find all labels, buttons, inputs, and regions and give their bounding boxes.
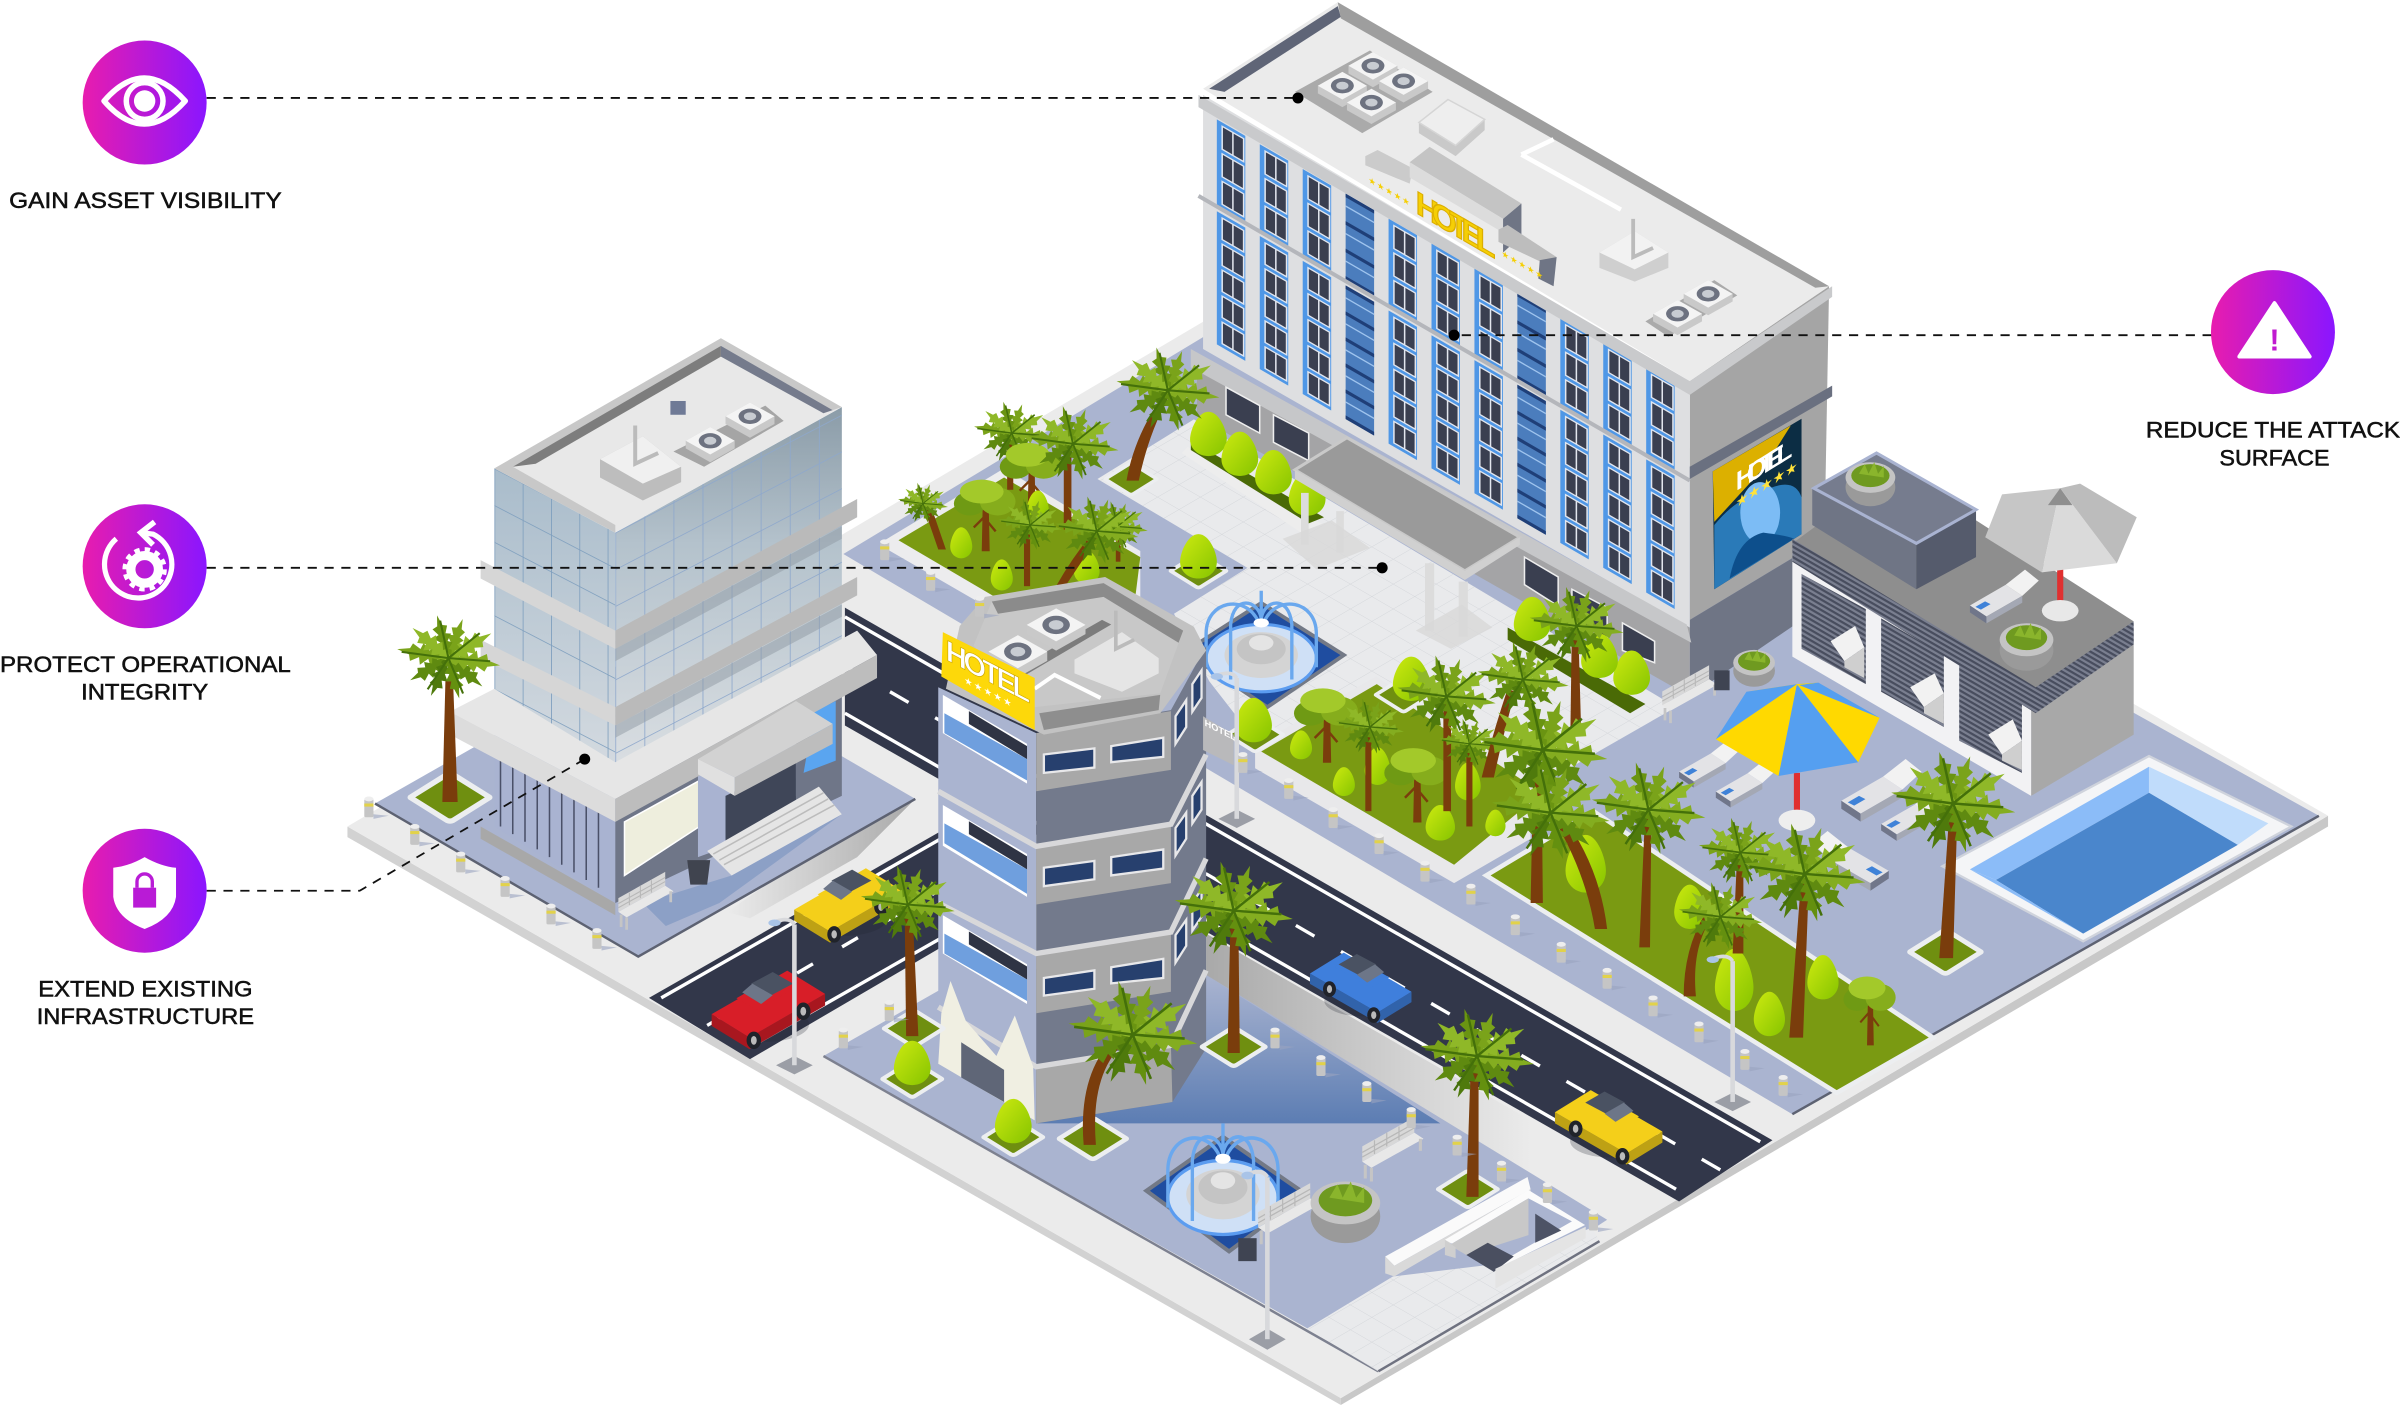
- tower entrance: [938, 981, 1035, 1120]
- tiled plaza: [1097, 419, 1676, 804]
- roof vent box: [1419, 99, 1485, 156]
- roof skylight outline: [1521, 139, 1621, 210]
- entrance stairs: [707, 787, 842, 875]
- roof parapet: [1209, 6, 1341, 92]
- middle garden trees and palms: [1290, 585, 1625, 841]
- roof hatch: [600, 425, 681, 500]
- label: reduce the attack surface: [2146, 418, 2400, 470]
- label: reduce the attack surface: REDUCE THE ATTACK: [2146, 418, 2400, 443]
- label: reduce the attack surface: SURFACE: [2219, 445, 2330, 470]
- annex loungers: [1831, 626, 2022, 770]
- blue screen: [804, 701, 836, 773]
- floor slab middle: [481, 577, 857, 738]
- bench and planter by hotel corner: [1662, 650, 1775, 723]
- right resort plot: [843, 263, 2319, 1114]
- billboard: [1713, 419, 1802, 589]
- icon: warning triangle: [2211, 270, 2335, 394]
- road: side street: [649, 826, 949, 1059]
- palm tree left: [395, 613, 502, 821]
- main hotel building: [1182, 2, 1832, 696]
- label: extend existing infrastructure: INFRASTRUCTURE: [37, 1004, 254, 1029]
- street lamps: [768, 673, 1751, 1350]
- left building plot: [375, 646, 915, 957]
- tower hotel sign: ★★★★★: [964, 675, 1013, 711]
- bench: [618, 872, 673, 930]
- rooftop hotel sign: [1365, 147, 1557, 286]
- icon: warning triangle: !: [2269, 323, 2280, 357]
- sidewalk shadows: [727, 799, 1531, 1178]
- small hotel directory sign: [1203, 716, 1236, 765]
- hotel window columns: [1217, 119, 1675, 609]
- rooftop hotel sign: HOTEL: [1416, 185, 1495, 266]
- front tiled corner: [1307, 1227, 1599, 1371]
- hotel roof: [1203, 2, 1829, 381]
- roof lounger: [1970, 570, 2039, 623]
- octagonal hotel tower: [938, 577, 1206, 1123]
- plinth: [481, 826, 615, 915]
- back garden palms and trees: [897, 345, 1221, 590]
- colourful parasol: [1716, 683, 1880, 831]
- red car: [712, 971, 825, 1049]
- label: protect operational integrity: [0, 652, 291, 704]
- subway stair entrance: [1385, 1177, 1586, 1289]
- tower side windows: [1044, 670, 1202, 996]
- label: extend existing infrastructure: [37, 976, 254, 1029]
- tower floor lips: [938, 755, 1206, 1067]
- yellow car right: [1555, 1090, 1662, 1165]
- road: main diagonal: [845, 608, 1772, 1201]
- dashed connector: protect operational integrity: [207, 562, 1388, 573]
- canopy slab: [450, 631, 877, 822]
- front plot palms: [859, 859, 1536, 1207]
- annex pool house: [1792, 453, 2137, 796]
- annex striped openings: [1802, 574, 2022, 773]
- cars: [712, 868, 1662, 1165]
- billboard: HOTEL: [1736, 433, 1792, 498]
- glass right face: [615, 407, 842, 799]
- hotel base cornice: [1191, 349, 1691, 643]
- small hotel directory sign: HOTEL: [1205, 718, 1236, 744]
- tower front balconies: [943, 695, 1027, 1004]
- entrance awning: [698, 701, 833, 796]
- tower hotel sign: HOTEL: [946, 633, 1030, 710]
- lawn: long garden: [1486, 811, 1933, 1093]
- pool: [1942, 756, 2291, 941]
- blue car: [1310, 953, 1411, 1023]
- hotel side wall: [1690, 286, 1829, 620]
- lawn: middle garden: [1255, 676, 1531, 883]
- roof air conditioners: [670, 401, 784, 467]
- annex roof box: [1812, 453, 1976, 589]
- roof: [494, 338, 842, 533]
- billboard: ★★★★★: [1736, 457, 1797, 512]
- back fountain: [1185, 591, 1344, 707]
- dashed connector: gain asset visibility: [207, 92, 1303, 103]
- hotel ground floor: [1197, 355, 1690, 696]
- grey parasol: [1985, 484, 2137, 621]
- tower roof: [946, 577, 1206, 735]
- floor slab upper: [481, 499, 857, 661]
- yellow pickup left: [794, 868, 902, 943]
- front fountain: [1146, 1123, 1306, 1251]
- ground floor left wall: [494, 735, 615, 903]
- ground slab: [347, 244, 2328, 1405]
- pool deck loungers: [1679, 740, 1946, 891]
- front plaza furniture: [1238, 1117, 1423, 1261]
- dashed connector: reduce the attack surface: [1449, 330, 2212, 341]
- front plot: [823, 967, 1607, 1371]
- hotel facade: [1203, 95, 1690, 628]
- label: protect operational integrity: PROTECT OPERATIONAL: [0, 652, 291, 677]
- trash bin: [687, 860, 710, 885]
- bollards: [364, 539, 1803, 1232]
- rooftop hotel sign: ★★★★★: [1368, 176, 1411, 209]
- hotel ground floor windows: [1226, 387, 1655, 663]
- ground floor right wall: [615, 673, 842, 903]
- entrance canopy: [1283, 438, 1520, 649]
- tower roof equipment: [988, 608, 1159, 698]
- plaza bushes: [1171, 534, 1650, 751]
- dashed connector: extend existing infrastructure: [207, 754, 590, 891]
- roof hatch: [1599, 219, 1668, 282]
- mid facade band: [1198, 196, 1690, 481]
- lawn: back garden: [885, 468, 1140, 605]
- roof planters: [1846, 462, 2053, 671]
- tower right face: [1036, 646, 1206, 1123]
- glowing sign: [624, 781, 699, 875]
- palm tree by pool: [1889, 749, 2017, 973]
- icon: eye: [83, 41, 207, 165]
- lobby: [698, 719, 796, 865]
- long garden bushes and palms: [1476, 694, 1896, 1045]
- tower left face: [938, 687, 1036, 1123]
- label: protect operational integrity: INTEGRITY: [81, 679, 208, 704]
- side wall band: [1690, 386, 1832, 479]
- rooftop air conditioners: [1295, 51, 1737, 337]
- rooftop hotel sign: ★★★★★: [1502, 249, 1544, 283]
- icon: gear with circular arrow: [83, 504, 207, 628]
- tower light bands: [1036, 711, 1172, 1123]
- label: extend existing infrastructure: EXTEND EXISTING: [38, 976, 253, 1001]
- left building: [450, 338, 877, 930]
- icon: shield with lock: [83, 829, 207, 953]
- glass left face: [494, 468, 615, 799]
- hedge by entrance: [1182, 412, 1326, 533]
- label: gain asset visibility: GAIN ASSET VISIBILITY: [9, 188, 282, 213]
